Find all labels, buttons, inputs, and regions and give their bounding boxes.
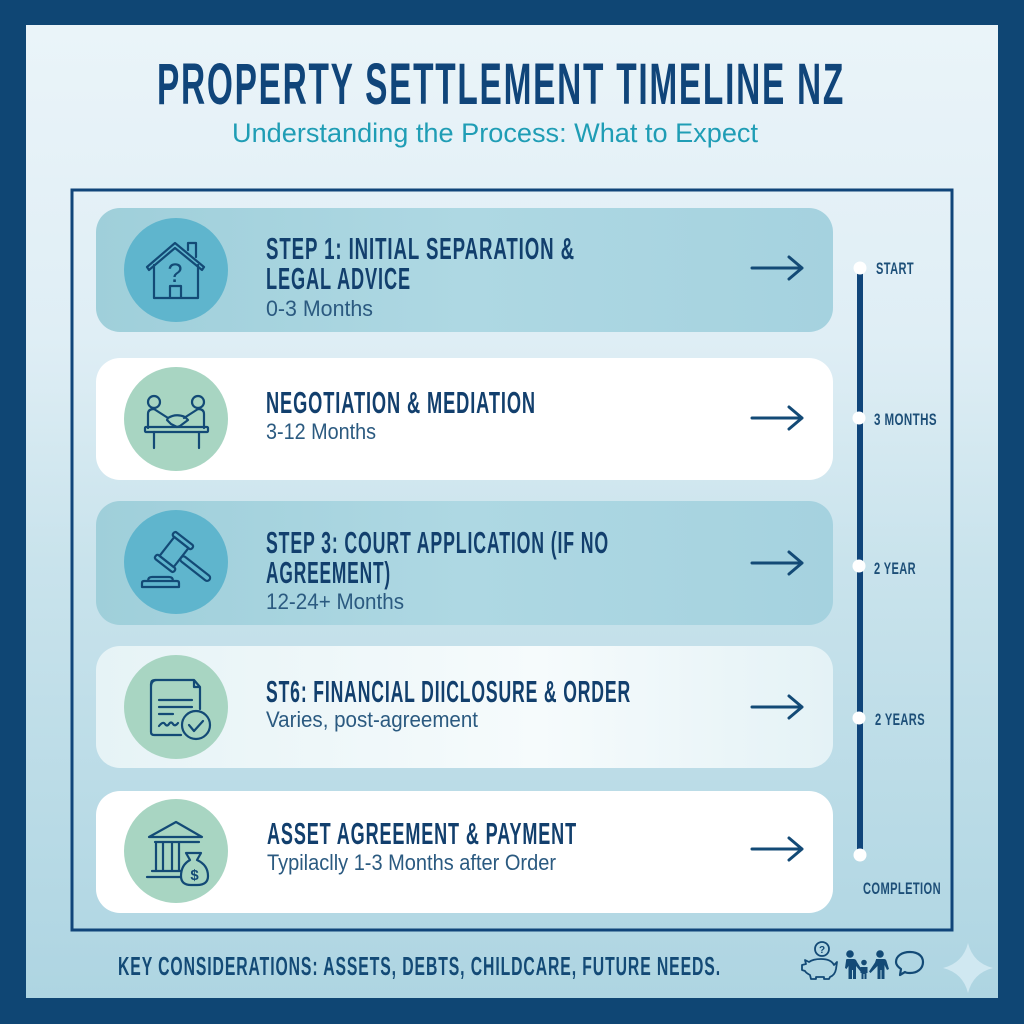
panel: step 4 xyxy=(96,646,833,768)
panel: step 5 xyxy=(96,791,833,913)
step 2 heading: NEGOTIATION & MEDIATION xyxy=(266,385,536,420)
timeline label: 2 years: 2 YEARS xyxy=(875,710,925,729)
timeline label: completion: COMPLETION xyxy=(863,879,941,898)
timeline frame xyxy=(72,190,952,930)
step 5 duration: Typilaclly 1-3 Months after Order xyxy=(267,850,556,875)
icon: sparkle xyxy=(943,943,993,993)
icon: house with question mark xyxy=(124,218,228,322)
step 4 heading: ST6: FINANCIAL DIICLOSURE & ORDER xyxy=(266,674,631,709)
timeline label: start: START xyxy=(876,259,914,278)
step 5 heading: ASSET AGREEMENT & PAYMENT xyxy=(267,816,577,851)
arrow xyxy=(752,552,802,574)
panel: step 2 xyxy=(96,358,833,480)
step 2 duration: 3-12 Months xyxy=(266,419,376,444)
step 1 duration: 0-3 Months xyxy=(266,296,373,321)
step 3 heading line 2: AGREEMENT) xyxy=(266,555,391,590)
arrow xyxy=(752,838,802,860)
timeline label: 2 year: 2 YEAR xyxy=(874,559,916,578)
icon: bank and money bag xyxy=(124,799,228,903)
icon: family xyxy=(845,950,889,979)
step 3 heading: STEP 3: COURT APPLICATION (IF NO xyxy=(266,525,609,560)
icon: signed document with check xyxy=(124,655,228,759)
panel: step 1 xyxy=(96,208,833,332)
arrow xyxy=(752,407,802,429)
step 1 heading line 2: LEGAL ADVICE xyxy=(266,261,411,296)
arrow xyxy=(752,257,802,279)
arrow xyxy=(752,696,802,718)
icon: gavel xyxy=(124,510,228,614)
timeline label: 3 months: 3 MONTHS xyxy=(874,410,937,429)
step 1 heading: STEP 1: INITIAL SEPARATION & xyxy=(266,231,575,266)
icon: piggy bank xyxy=(802,942,837,979)
step 4 duration: Varies, post-agreement xyxy=(266,707,478,732)
icon: handshake at table xyxy=(124,367,228,471)
panel: step 3 xyxy=(96,501,833,625)
icon: speech bubble xyxy=(896,952,923,975)
vertical timeline xyxy=(852,259,941,898)
icon: piggy bank: ? xyxy=(819,945,825,956)
icon: bank and money bag: $ xyxy=(190,867,199,884)
subtitle: Understanding the Process: What to Expect xyxy=(232,118,758,148)
icon: house with question mark: ? xyxy=(167,258,183,288)
step 3 duration: 12-24+ Months xyxy=(266,589,404,614)
